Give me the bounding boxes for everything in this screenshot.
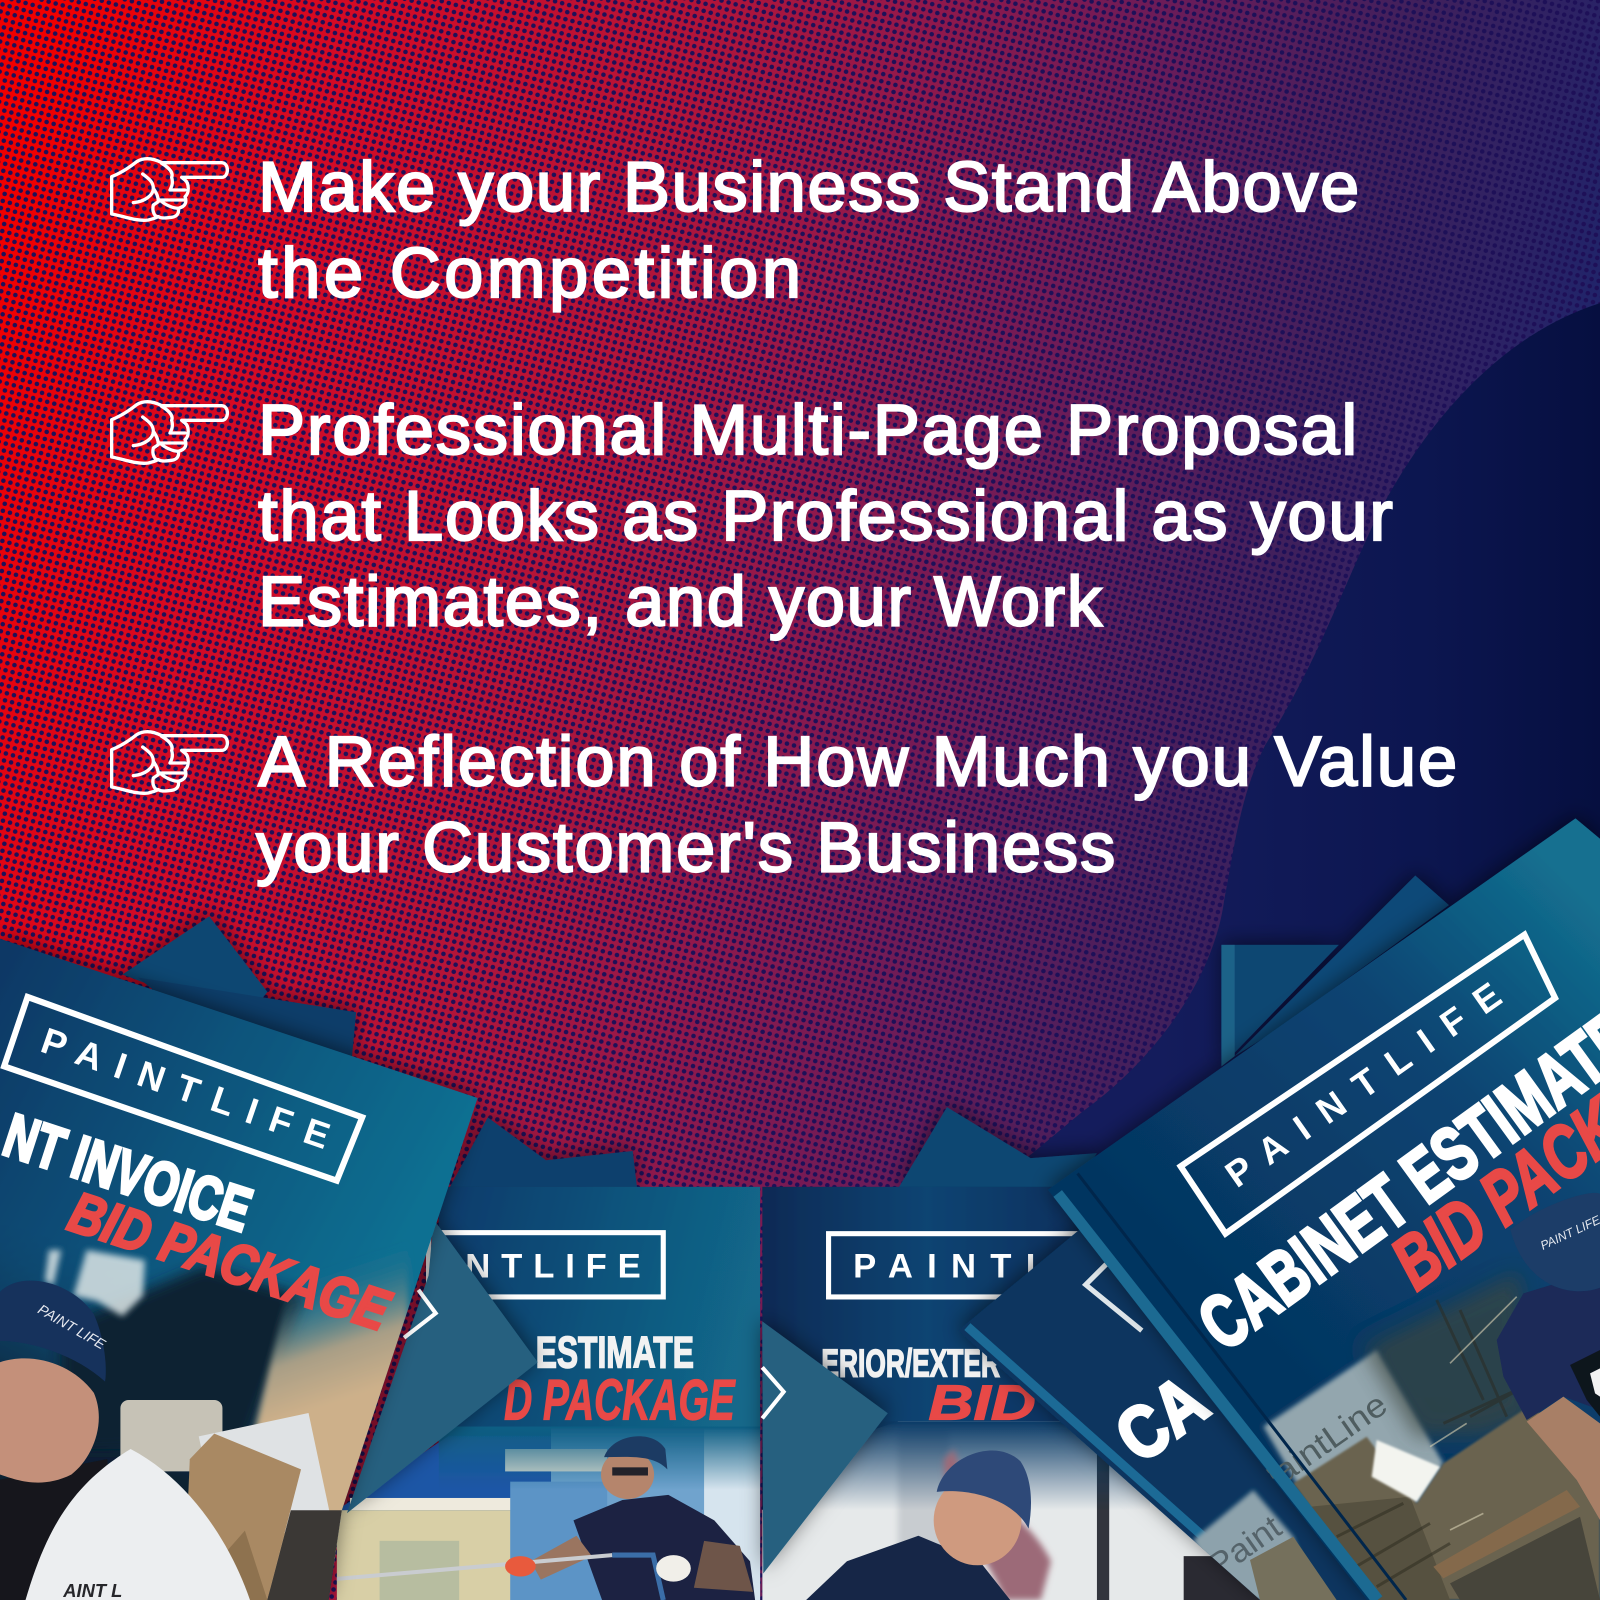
- logo box: PAINTL: [853, 1248, 1047, 1286]
- cover title fragment: CA: [1100, 1358, 1222, 1478]
- logo box: [829, 1234, 1124, 1297]
- cover title: BID PACKAGE: [61, 1180, 398, 1344]
- bullet 1: pointing hand icon: [112, 159, 227, 220]
- bullet 3 text: A Reflection of How Much you Value: [258, 722, 1457, 801]
- cover title: NT INVOICE: [0, 1101, 260, 1244]
- cover title: ERIOR/EXTER: [821, 1343, 1000, 1386]
- book: cabinet estimate lower copy: [958, 1194, 1367, 1600]
- bullet 3 text: [256, 722, 1457, 886]
- cover logo fragment: [762, 1367, 784, 1418]
- cover photo and logo text: Paint: [1202, 1508, 1289, 1585]
- bullet 2 text: [258, 390, 1393, 641]
- cover title: [1, 1112, 396, 1332]
- logo box: PAINTLIFE: [1218, 974, 1509, 1195]
- painter in white hoodie: PAINT LIFE: [35, 1302, 108, 1353]
- cover title: ESTIMATE: [536, 1326, 694, 1377]
- book stack: left back covers: [122, 916, 638, 1194]
- book: fanned cover overlapping interior estimate: [762, 1321, 888, 1573]
- cover title: D PACKAGE: [504, 1368, 736, 1432]
- cover photo: kitchen interior, painter shirt and arm: [1247, 1270, 1600, 1600]
- cover logo fragment: [404, 1290, 436, 1338]
- book: fanned cover overlapping roof estimate: [347, 1219, 538, 1513]
- logo box: [429, 1233, 663, 1297]
- cover title: BID: [929, 1376, 1036, 1430]
- cover photo: kitchen interior, painter shirt and arm: PaintLine: [1247, 1386, 1394, 1505]
- cover photo and logo text: [1193, 1490, 1337, 1600]
- bullet 1 text: the Competition: [258, 233, 801, 312]
- cover title: [504, 1336, 736, 1421]
- cover title: [822, 1347, 1035, 1420]
- bullet 2 text: Professional Multi-Page Proposal: [258, 390, 1357, 469]
- logo box: [1181, 935, 1555, 1234]
- spine highlight: [1057, 1173, 1406, 1600]
- bullet 3 text: your Customer's Business: [256, 807, 1115, 886]
- painter in white hoodie: [0, 1281, 250, 1600]
- book stack: right back covers: [1221, 876, 1449, 1066]
- painter cap: [1510, 1193, 1600, 1291]
- bullet 1 text: Make your Business Stand Above: [258, 147, 1359, 226]
- cover logo fragment: [1086, 1264, 1142, 1331]
- book: interior/exterior estimate cover: [762, 1187, 1276, 1600]
- logo box: [4, 997, 362, 1181]
- background wave: dark navy curve: [1020, 303, 1600, 1224]
- book stack: centre back covers: [898, 1107, 1097, 1194]
- book: paint invoice cover: [0, 918, 510, 1600]
- bullet 2: pointing hand icon: [112, 402, 227, 463]
- cover photo: van and painter: [762, 1421, 1276, 1600]
- bullet 3: pointing hand icon: [112, 732, 227, 793]
- book: roof estimate cover: [316, 1187, 760, 1600]
- logo box: NTLIFE: [465, 1248, 641, 1286]
- bullet 2 text: Estimates, and your Work: [258, 562, 1103, 641]
- bullet 2 text: that Looks as Professional as your: [258, 476, 1393, 555]
- logo box: PAINTLIFE: [36, 1020, 335, 1157]
- cover photo: shop shelves and boxes: [45, 1235, 408, 1600]
- book: cabinet estimate main cover: [1020, 796, 1600, 1600]
- bullet 1 text: [258, 147, 1359, 312]
- cover photo: house and painter: [316, 1427, 760, 1600]
